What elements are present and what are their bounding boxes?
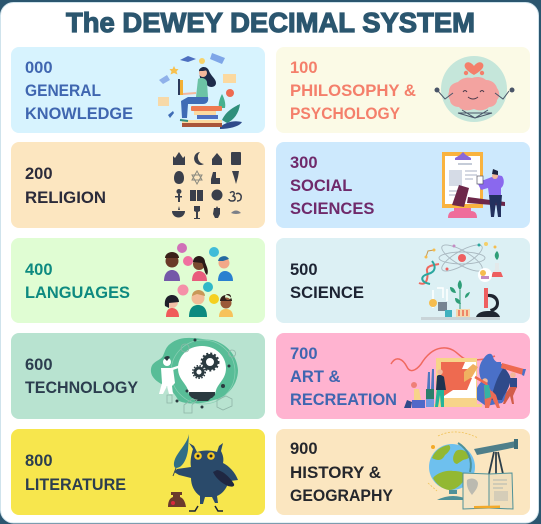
icon: clipboard, gavel and man: [442, 152, 505, 218]
panel: 200 religion: [11, 142, 265, 228]
panel: 600 technology: [11, 333, 265, 419]
label: 000 general knowledge: [25, 59, 133, 123]
label: 500 science: [290, 261, 364, 302]
label: 800 literature: LITERATURE: [25, 476, 126, 494]
label: 100 philosophy and psychology: PSYCHOLOGY: [290, 105, 400, 123]
label: 300 social sciences: SOCIAL: [290, 177, 352, 195]
panel: 000 general knowledge: [11, 47, 265, 133]
label: 400 languages: LANGUAGES: [25, 284, 130, 302]
label: 900 history and geography: 900: [290, 440, 318, 458]
label: 700 art and recreation: RECREATION: [290, 391, 397, 409]
label: 800 literature: [25, 452, 126, 494]
label: 200 religion: 200: [25, 165, 53, 183]
label: 700 art and recreation: 700: [290, 345, 318, 363]
panel: 500 science: [276, 238, 530, 323]
label: 900 history and geography: HISTORY &: [290, 464, 381, 482]
icon: artists with canvas: [391, 348, 526, 408]
label: 000 general knowledge: KNOWLEDGE: [25, 105, 133, 123]
label: 000 general knowledge: 000: [25, 59, 53, 77]
icon: people talking: [164, 243, 233, 317]
label: 800 literature: 800: [25, 452, 53, 470]
label: 900 history and geography: [290, 440, 393, 505]
label: 100 philosophy and psychology: [290, 59, 416, 123]
label: 300 social sciences: 300: [290, 154, 318, 172]
panel: 400 languages: [11, 238, 265, 323]
icon: woman studying on books: [158, 53, 242, 129]
icon: meditating brain: [434, 56, 514, 122]
label: 200 religion: [25, 165, 106, 207]
label: 400 languages: [25, 261, 130, 302]
label: 400 languages: 400: [25, 261, 53, 279]
icon: globe, telescope and book: [428, 432, 518, 509]
panel: 900 history and geography: [276, 429, 530, 515]
label: 100 philosophy and psychology: 100: [290, 59, 318, 77]
label: 600 technology: TECHNOLOGY: [25, 379, 138, 397]
icon: light bulb with gears and robot: [151, 338, 238, 413]
label: 700 art and recreation: [290, 345, 397, 409]
label: 200 religion: RELIGION: [25, 189, 106, 207]
label: 900 history and geography: GEOGRAPHY: [290, 487, 393, 505]
panel: 800 literature: [11, 429, 265, 515]
label: 500 science: SCIENCE: [290, 284, 364, 302]
icon: owl with quill and ink: [168, 434, 238, 511]
label: 000 general knowledge: GENERAL: [25, 82, 101, 100]
panel: 700 art and recreation: [276, 333, 530, 419]
label: 300 social sciences: [290, 154, 374, 218]
label: 700 art and recreation: ART &: [290, 368, 340, 386]
icon: science illustration: [419, 240, 503, 320]
icon: religious symbols grid: [172, 152, 241, 219]
label: 100 philosophy and psychology: PHILOSOPHY &: [290, 82, 416, 100]
label: 300 social sciences: SCIENCES: [290, 200, 374, 218]
label: 600 technology: 600: [25, 356, 53, 374]
title: The DEWEY DECIMAL SYSTEM: [66, 7, 475, 38]
panel: 100 philosophy and psychology: [276, 47, 530, 133]
panel: 300 social sciences: [276, 142, 530, 228]
label: 500 science: 500: [290, 261, 318, 279]
label: 600 technology: [25, 356, 138, 397]
